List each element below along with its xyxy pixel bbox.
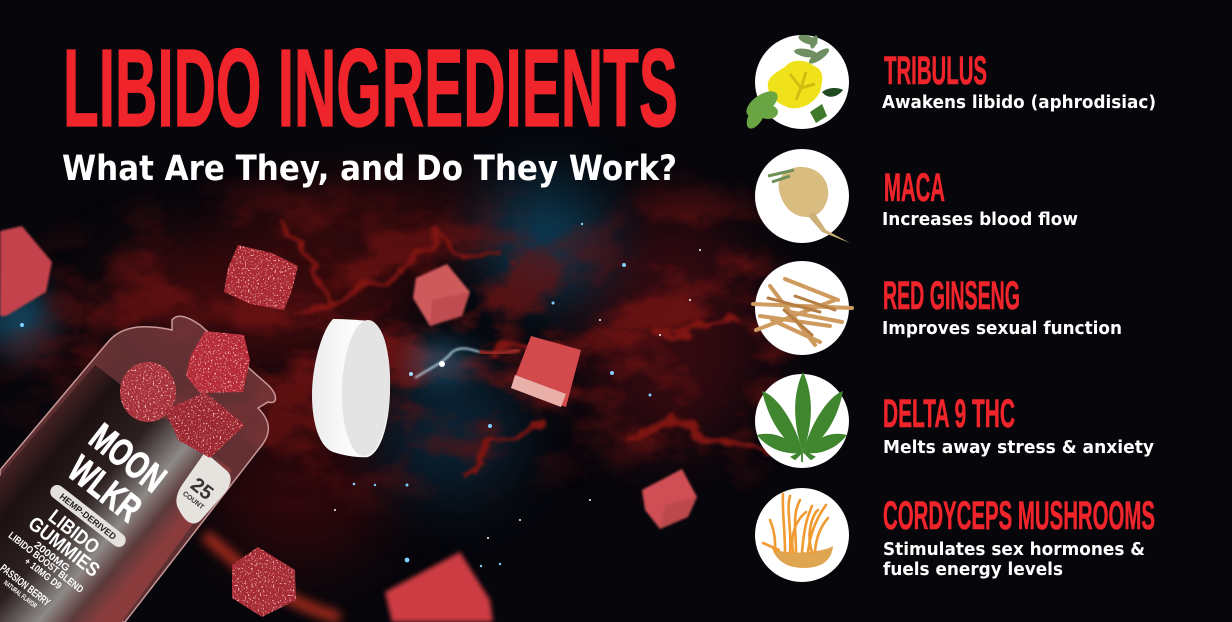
icon: cordyceps mushrooms [755,488,849,582]
bottle label text: LIBIDO BOOST BLEND [6,530,85,596]
bottle label text: 25 [186,474,217,505]
gummy: cube 3 [413,264,470,326]
text: cordyceps benefit: Stimulates sex hormones & [883,539,1145,560]
bottle label text: WLKR [60,448,149,531]
gummy: cube 4 [511,336,581,407]
bottle cap [312,319,392,457]
bottle label text: 2000MG [32,540,72,574]
subtitle: What Are They, and Do They Work? [62,149,677,189]
stars [20,223,701,567]
icon: red ginseng roots [753,261,852,355]
central star burst [409,344,520,380]
ingredient 3: red ginseng: RED GINSENG [883,274,1020,318]
bottle label text: + 10MG D9 [22,556,64,592]
bottle label [0,365,232,622]
gummy: lower [232,547,296,617]
ingredient 5: cordyceps [755,488,1155,582]
gummy: top center [224,245,298,310]
gummy: blurred foreground [385,552,493,622]
bottle [0,316,275,622]
text: tribulus benefit: Awakens libido (aphrodisiac) [882,92,1156,113]
ingredient 4: delta 9 thc [755,372,1154,468]
gummy: upper left [0,226,52,316]
heading: maca: MACA [884,166,945,210]
text: red ginseng benefit: Improves sexual function [882,318,1122,339]
text: cordyceps benefit: fuels energy levels [883,559,1063,580]
ingredient 3: red ginseng [753,261,1122,355]
text: delta 9 benefit: Melts away stress & anxiety [883,437,1154,458]
bottle label text: LIBIDO [44,506,103,559]
text: cordyceps benefit [883,539,1145,580]
bottle label text: HEMP-DERIVED [58,491,119,542]
nebula glow bottom left [205,535,340,618]
heading: tribulus: TRIBULUS [884,49,987,93]
ingredient 2: maca [755,149,1078,243]
bottle glass body [0,316,276,622]
background: space nebula [0,153,800,622]
bottle label text [0,416,217,610]
gummies in the bottle [120,331,250,458]
bottle label text: GUMMIES [24,513,104,582]
nebula wisps [285,225,770,470]
icon: tribulus flower [742,33,849,132]
title: LIBIDO INGREDIENTS [63,27,678,150]
gummy: cube 5 [642,469,697,529]
ingredient 1: tribulus [742,33,1156,132]
icon: cannabis leaf [755,372,849,468]
bottle label text: MOON [81,416,173,501]
heading: delta 9 thc: DELTA 9 THC [883,392,1015,436]
bottle label text: COUNT [181,490,205,512]
icon: maca root [755,149,850,243]
count pill [176,452,231,523]
text: maca benefit: Increases blood flow [882,209,1078,230]
